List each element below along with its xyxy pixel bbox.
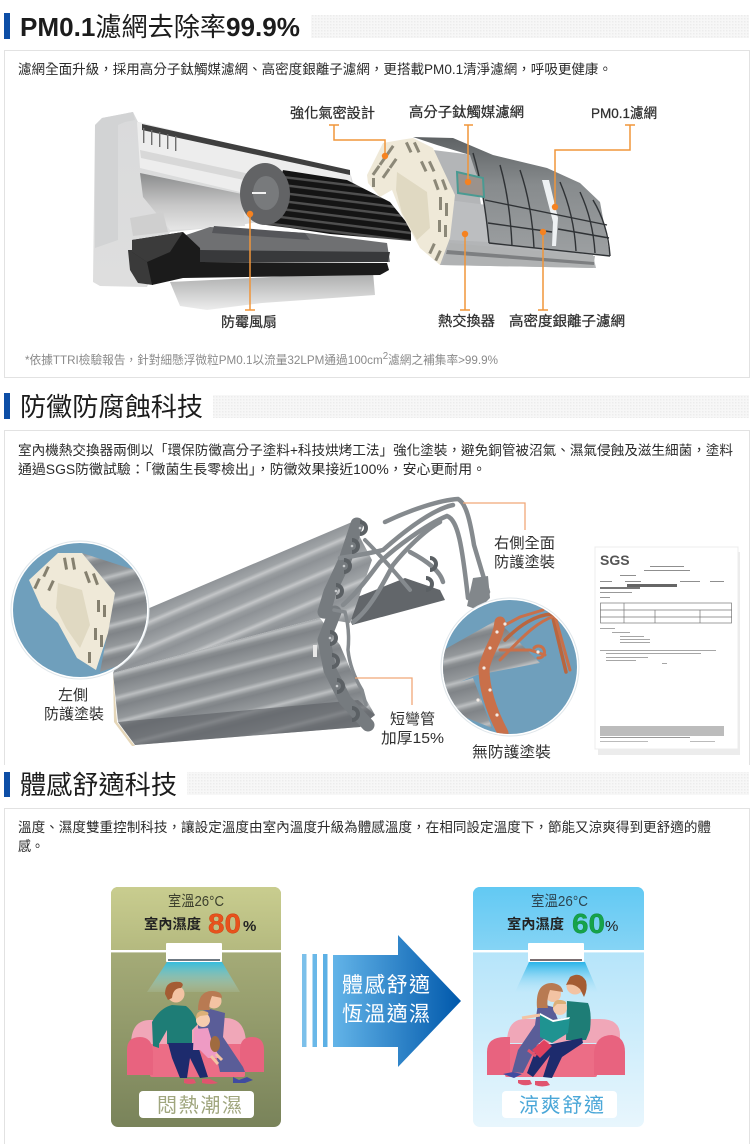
section 2 heading: 防黴防腐蝕科技 (20, 392, 203, 422)
dark gap (128, 250, 153, 285)
callout labels (221, 104, 657, 330)
black vent bar (132, 232, 389, 285)
fan cylinder (266, 170, 411, 241)
panel: comfort technology (4, 808, 750, 1144)
callout lines and dots (245, 125, 635, 310)
callout labels: 防霉風扇 (221, 314, 277, 330)
coil labels: 左側 (58, 687, 88, 704)
panel: anti-mold coating (4, 430, 750, 765)
panel: PM0.1 filter (4, 50, 750, 378)
card: humid room: 室溫26°C (168, 893, 224, 910)
air conditioner icon (147, 943, 240, 992)
arrow: transition (302, 935, 461, 1067)
footnote: 2 (383, 351, 389, 362)
family on sofa (127, 982, 264, 1084)
woman (512, 1003, 560, 1073)
child (193, 1028, 220, 1058)
callout lines (355, 503, 525, 705)
illustration: heat exchanger coil (113, 499, 490, 746)
coil labels (44, 535, 555, 761)
section 2 heading (4, 392, 749, 422)
book (540, 1013, 570, 1043)
card: humid room: % (243, 918, 256, 935)
intro text: 室內機熱交換器兩側以「環保防黴高分子塗料+科技烘烤工法」強化塗裝，避免銅管被沼氣、濕氣侵蝕及滋生細菌，塗料 (18, 442, 733, 458)
card: comfortable room: 室溫26°C (531, 893, 588, 910)
card: humid room (111, 887, 281, 1127)
coil labels: 無防護塗裝 (472, 743, 551, 761)
footnote: 濾網之補集率>99.9% (388, 352, 498, 367)
card: comfortable room: % (605, 918, 618, 935)
card: comfortable room (473, 887, 644, 1127)
label: stuffy and humid: 悶熱潮濕 (157, 1094, 242, 1117)
label: cool and comfortable (502, 1091, 617, 1118)
coil labels: 防護塗裝 (44, 705, 104, 723)
callout labels: 熱交換器 (438, 313, 495, 329)
coil labels: 防護塗裝 (494, 553, 555, 571)
card: humid room: 室內濕度 (144, 916, 201, 932)
card: comfortable room: 室內濕度 (507, 916, 564, 932)
tray (183, 227, 390, 262)
callout labels: 高密度銀離子濾網 (509, 313, 625, 329)
label: cool and comfortable: 涼爽舒適 (519, 1094, 604, 1117)
inset circle: no coating (440, 598, 579, 736)
intro text: 濾網全面升級，採用高分子鈦觸媒濾網、高密度銀離子濾網，更搭載PM0.1清淨濾網，呼吸更健康。 (18, 61, 612, 77)
callout labels: 高分子鈦觸媒濾網 (409, 104, 524, 120)
man (566, 1001, 591, 1040)
card: comfortable room: 60 (572, 908, 605, 939)
intro text (18, 819, 711, 854)
intro text: 溫度、濕度雙重控制科技，讓設定溫度由室內溫度升級為體感溫度，在相同設定溫度下，節能又涼爽得到更舒適的體 (18, 819, 711, 835)
inset circle: left side coating (11, 541, 150, 679)
footnote: *依據TTRI檢驗報告，針對細懸浮微粒PM0.1以流量32LPM通過100cm (25, 353, 393, 367)
filter (413, 137, 610, 256)
shell (93, 112, 355, 287)
card: humid room: 80 (208, 908, 241, 939)
flap (170, 272, 375, 310)
section 3 heading (4, 770, 749, 800)
label: stuffy and humid (139, 1091, 254, 1118)
callout labels: PM0.1濾網 (591, 105, 657, 121)
SGS certificate document (595, 547, 740, 755)
tubes (334, 499, 488, 705)
SGS certificate document: SGS (600, 552, 630, 568)
section 3 heading: 體感舒適科技 (20, 770, 177, 800)
arrow: transition: 體感舒適 (342, 974, 430, 997)
callout labels: 強化氣密設計 (290, 105, 375, 121)
air conditioner icon (515, 943, 598, 992)
intro text (18, 442, 733, 477)
coil labels: 短彎管 (390, 710, 435, 728)
section 1 heading (4, 12, 749, 42)
illustration: opened air conditioner unit (93, 112, 610, 310)
woman (198, 1009, 245, 1072)
coil labels: 加厚15% (381, 730, 444, 747)
u-bends (330, 522, 436, 720)
right unit body (433, 150, 596, 268)
tube plate (324, 524, 368, 725)
end plate (367, 138, 455, 265)
intro text: 通過SGS防黴試驗：「黴菌生長零檢出」，防黴效果接近100%，安心更耐用。 (18, 461, 486, 477)
intro text: 感。 (18, 838, 44, 854)
family reading on sofa (487, 975, 625, 1086)
coil labels: 右側全面 (494, 535, 555, 552)
section 1 heading: PM0.1濾網去除率99.9% (20, 12, 300, 42)
man (152, 1005, 198, 1048)
arrow: transition: 恆溫適濕 (342, 1003, 430, 1026)
child (553, 1001, 567, 1015)
